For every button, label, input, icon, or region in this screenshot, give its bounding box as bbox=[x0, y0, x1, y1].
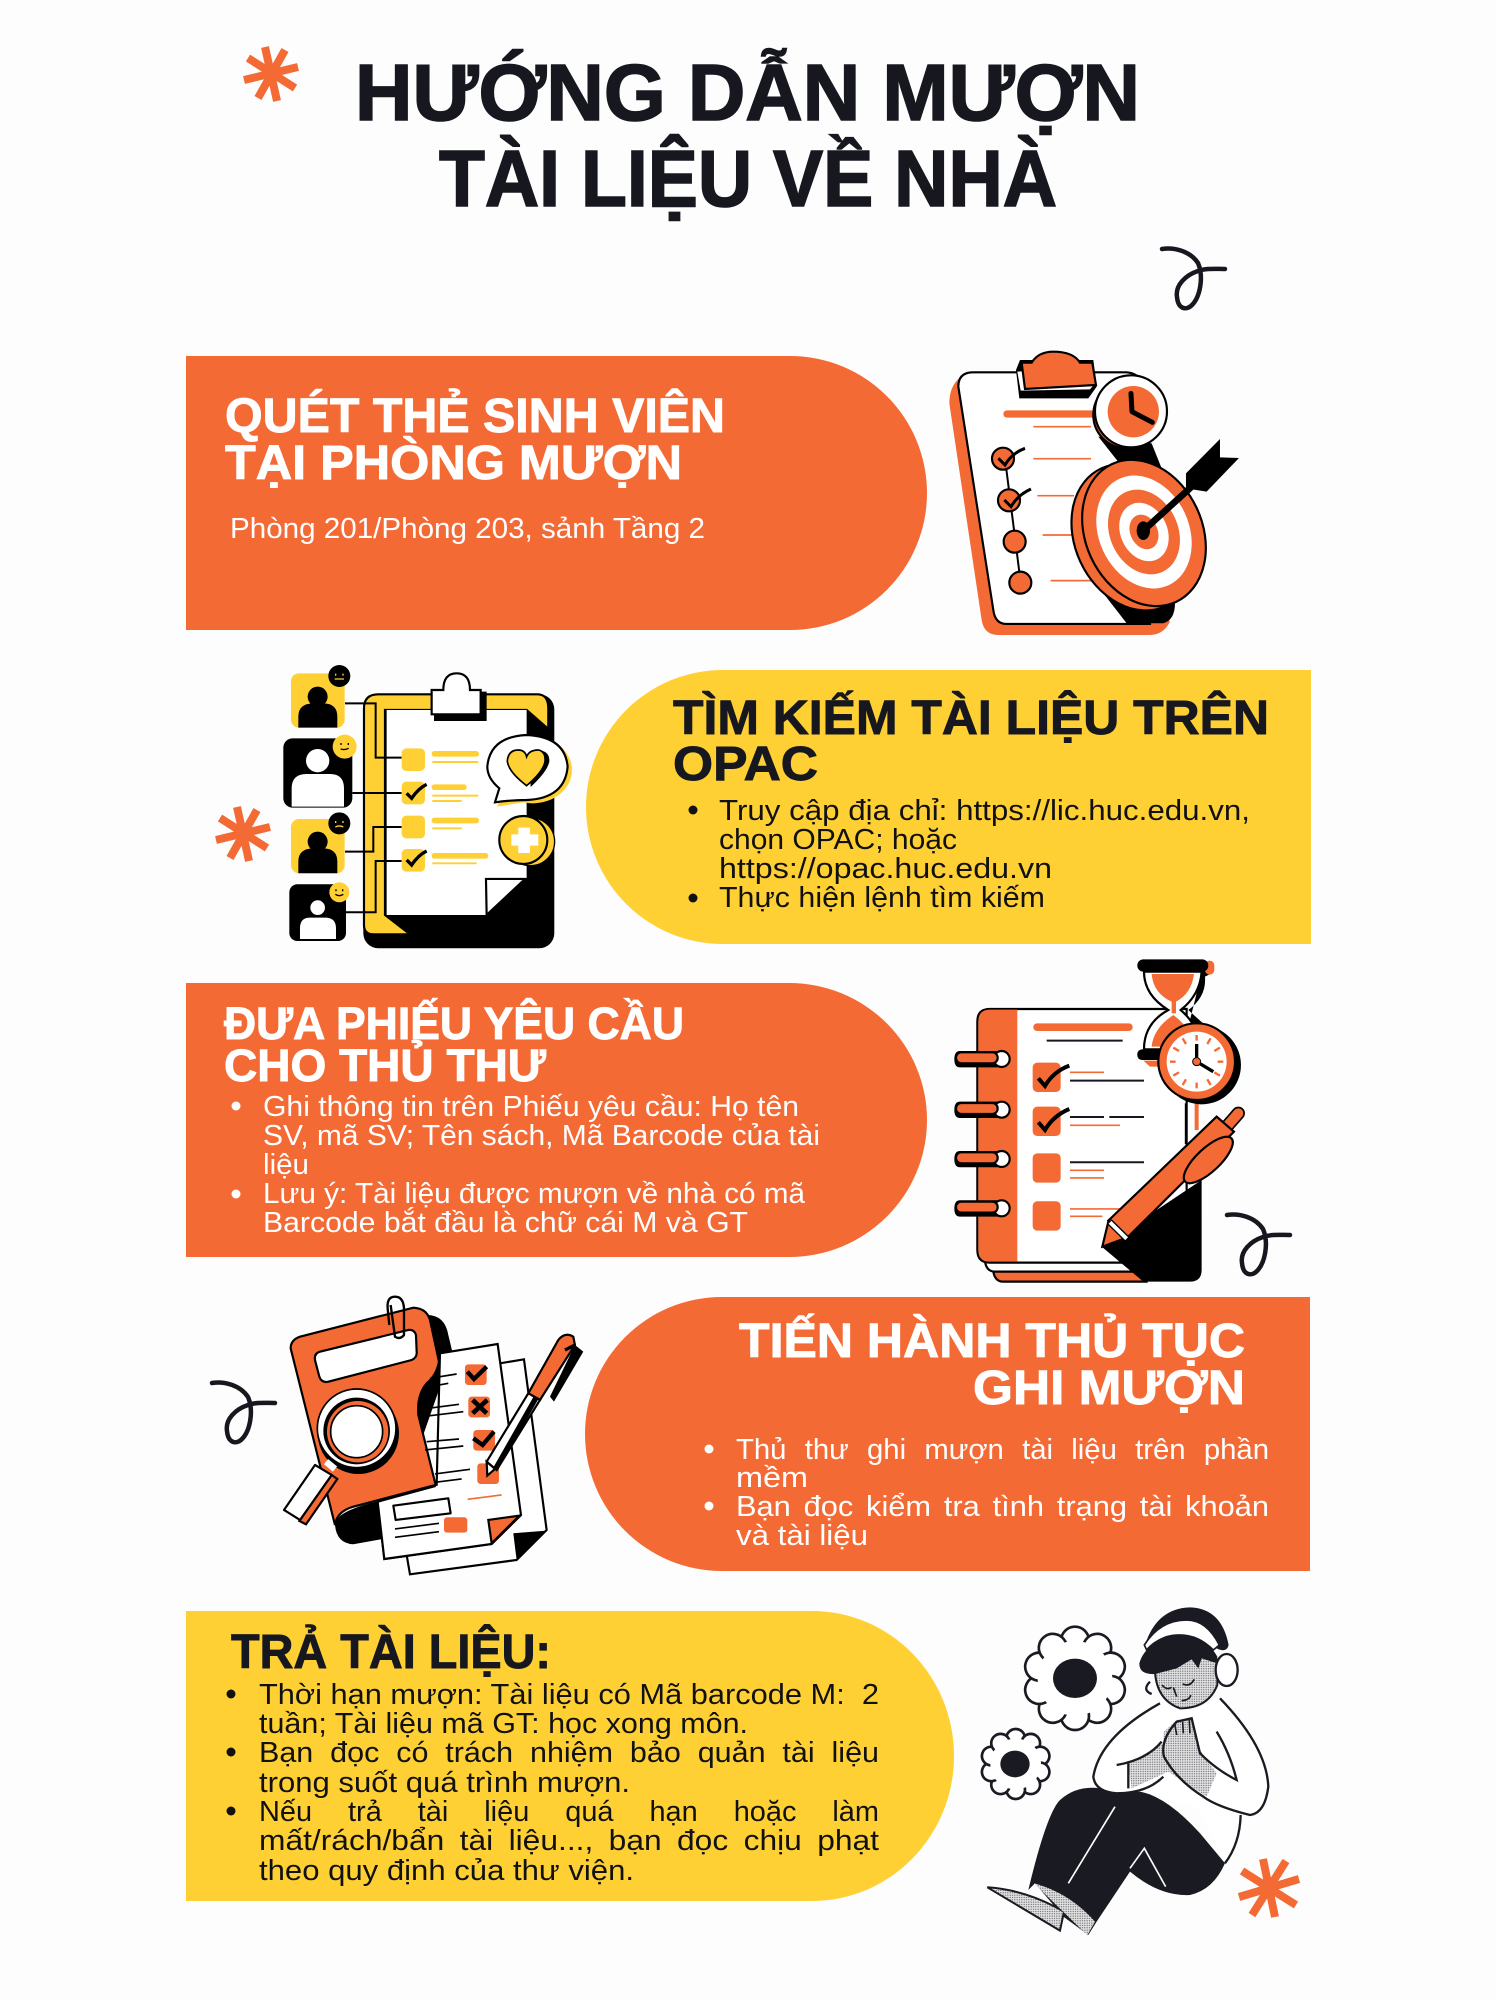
title bbox=[355, 48, 1140, 223]
panel: step 3 request slip card bbox=[186, 983, 927, 1257]
icon: large flower bbox=[1022, 1627, 1128, 1730]
text: step 5 bullets: Nếu trả tài liệu quá hạn hoặc làm bbox=[259, 1796, 879, 1828]
icon: asterisk near users bbox=[216, 807, 270, 861]
panel: step 4 checkout card bbox=[585, 1297, 1310, 1571]
text: step 4 bullets: Bạn đọc kiểm tra tình trạng tài khoản bbox=[736, 1491, 1269, 1523]
icon: small flower bbox=[979, 1729, 1052, 1799]
text: step 3 bullets: Barcode bắt đầu là chữ cái M và GT bbox=[263, 1206, 748, 1239]
heading: step 4: GHI MƯỢN bbox=[973, 1362, 1245, 1415]
icon: clipboard with target bbox=[949, 352, 1239, 635]
text: step 3 bullets: Lưu ý: Tài liệu được mượn về nhà có mã bbox=[263, 1178, 806, 1210]
text: step 4 bullets: và tài liệu bbox=[736, 1520, 868, 1552]
heading: step 2: OPAC bbox=[673, 738, 818, 791]
heading: step 1: QUÉT THẺ SINH VIÊN bbox=[225, 388, 725, 443]
text: step 5 bullets: theo quy định của thư viện. bbox=[259, 1855, 634, 1887]
icon: person with headphones and flowers bbox=[979, 1607, 1268, 1935]
heading: step 3: ĐƯA PHIẾU YÊU CẦU bbox=[224, 998, 684, 1049]
heading: step 5: TRẢ TÀI LIỆU: bbox=[231, 1624, 551, 1679]
text: step 3 bullets: liệu bbox=[263, 1149, 309, 1181]
panel: step 2 OPAC search card bbox=[586, 670, 1311, 944]
heading: step 3: CHO THỦ THƯ bbox=[224, 1040, 547, 1091]
text: step 2 bullets: https://opac.huc.edu.vn bbox=[719, 853, 1052, 885]
icon: clipboard with users bbox=[283, 665, 572, 948]
icon: squiggle near notebook bbox=[1227, 1215, 1290, 1274]
text: step 5 bullets: trong suốt quá trình mượn. bbox=[259, 1767, 630, 1799]
heading: step 2: TÌM KIẾM TÀI LIỆU TRÊN bbox=[673, 690, 1269, 745]
text: step 4 bullets: Thủ thư ghi mượn tài liệu trên phần bbox=[736, 1434, 1269, 1466]
text: step 2 bullets bbox=[688, 795, 1250, 914]
icon: binder with magnifier and forms bbox=[284, 1297, 583, 1574]
icon: asterisk near person bbox=[1239, 1859, 1299, 1917]
text: step 5 bullets: Bạn đọc có trách nhiệm bảo quản tài liệu bbox=[259, 1737, 879, 1769]
text: step 1 location: Phòng 201/Phòng 203, sảnh Tầng 2 bbox=[230, 513, 705, 545]
heading: step 1: TẠI PHÒNG MƯỢN bbox=[225, 435, 682, 490]
text: step 5 bullets bbox=[226, 1679, 879, 1887]
title: TÀI LIỆU VỀ NHÀ bbox=[439, 134, 1057, 223]
text: step 2 bullets: Truy cập địa chỉ: https://lic.huc.edu.vn, bbox=[719, 795, 1250, 827]
text: step 4 bullets bbox=[704, 1434, 1269, 1552]
heading: step 2 bbox=[673, 690, 1269, 791]
icon: squiggle near binder bbox=[212, 1383, 275, 1442]
text: step 5 bullets: tuần; Tài liệu mã GT: học xong môn. bbox=[259, 1708, 748, 1740]
panel: step 1 scan card bbox=[186, 356, 927, 630]
heading: step 3 bbox=[224, 998, 684, 1091]
panel: step 5 return card bbox=[186, 1611, 954, 1901]
text: step 3 bullets: Ghi thông tin trên Phiếu yêu cầu: Họ tên bbox=[263, 1091, 799, 1123]
icon: notebook with hourglass and pen bbox=[954, 959, 1241, 1282]
heading: step 4 bbox=[739, 1313, 1245, 1415]
heading: step 4: TIẾN HÀNH THỦ TỤC bbox=[739, 1313, 1245, 1368]
icon: title asterisk bbox=[244, 47, 298, 101]
text: step 5 bullets: mất/rách/bẩn tài liệu..., bạn đọc chịu phạt bbox=[259, 1825, 879, 1857]
text: step 3 bullets bbox=[232, 1091, 820, 1239]
text: step 2 bullets: Thực hiện lệnh tìm kiếm bbox=[719, 882, 1045, 914]
text: step 2 bullets: chọn OPAC; hoặc bbox=[719, 824, 957, 856]
heading: step 1 bbox=[225, 388, 725, 490]
text: step 4 bullets: mềm bbox=[736, 1462, 808, 1494]
text: step 3 bullets: SV, mã SV; Tên sách, Mã Barcode của tài bbox=[263, 1120, 820, 1152]
text: step 5 bullets: Thời hạn mượn: Tài liệu có Mã barcode M: 2 bbox=[259, 1679, 879, 1711]
title: HƯỚNG DẪN MƯỢN bbox=[355, 48, 1140, 137]
icon: top squiggle bbox=[1162, 249, 1225, 308]
